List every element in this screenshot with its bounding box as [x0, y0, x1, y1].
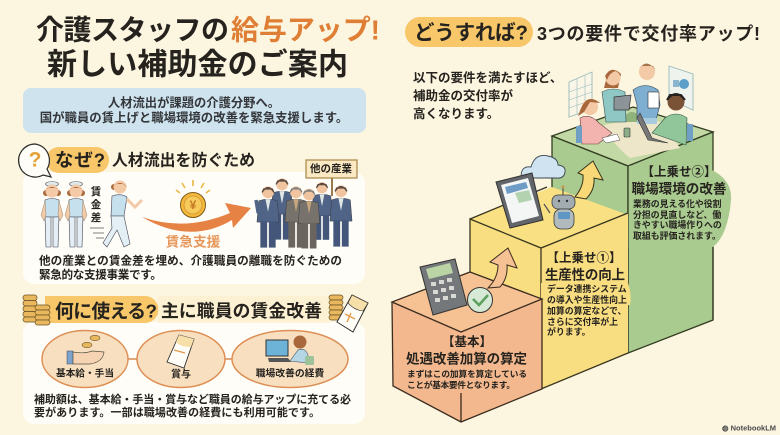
icon: yen coin: ¥ — [190, 198, 197, 212]
icon: coin stack and envelope right — [329, 295, 368, 332]
text: why body: 緊急的な支援事業です。 — [39, 268, 162, 282]
text: how intro: 高くなります。 — [413, 106, 499, 121]
heading: how — [405, 17, 760, 47]
label: productivity: の導入や生産性向上 — [547, 294, 627, 305]
icon: cloud — [521, 155, 565, 178]
label: basic: 処遇改善加算の算定 — [406, 350, 528, 366]
label: workplace improvement: 職場環境の改善 — [632, 180, 726, 196]
panel: why — [19, 144, 365, 284]
label: workplace improvement: 業務の見える化や役割 — [633, 198, 722, 209]
icon: nursing staff: 賃 — [91, 185, 102, 198]
title: 介護スタッフの — [36, 14, 229, 46]
text: uses body: 補助額は、基本給・手当・賞与など職員の給与アップに充てる必 — [34, 392, 351, 406]
heading: why: なぜ? — [55, 150, 105, 170]
heading: uses: 何に使える? — [55, 300, 157, 322]
label: basic: まずはこの加算を算定している — [407, 368, 527, 379]
label: productivity: データ連携システム — [547, 283, 627, 294]
label: workplace improvement: きやすい職場作りへの — [633, 219, 722, 230]
text: why body — [39, 254, 342, 282]
text: how intro: 補助金の交付率が — [413, 88, 514, 103]
icon: calculator — [420, 259, 467, 315]
heading: uses: 主に職員の賃金改善 — [161, 301, 322, 321]
title: 新しい補助金のご案内 — [47, 48, 348, 82]
arrow: orange up — [488, 248, 517, 288]
person standing left — [604, 70, 621, 88]
text: uses body: 要があります。一部は職場改善の経費にも利用可能です。 — [34, 405, 320, 419]
label: workplace improvement: 分担の見直しなど、働 — [633, 209, 721, 220]
text: how intro: 以下の要件を満たすほど、 — [413, 70, 562, 85]
label: productivity — [545, 250, 627, 337]
person standing right — [639, 64, 655, 80]
label: workplace improvement: 取組も評価されます。 — [633, 230, 721, 241]
step: productivity — [470, 187, 631, 389]
label: workplace improvement: 【上乗せ②】 — [641, 164, 717, 179]
title: 給与アップ! — [231, 14, 380, 46]
oval: bonus: 賞与 — [171, 368, 191, 380]
arrow: wage support — [142, 203, 251, 232]
step: workplace improvement — [552, 107, 731, 380]
label: productivity: 加算の算定などで、 — [547, 305, 626, 316]
icon: other industries workers — [256, 178, 352, 248]
intro box — [23, 88, 366, 133]
icon: coin stacks left — [23, 295, 50, 325]
icon: nursing staff — [41, 180, 142, 247]
illustration: team meeting — [569, 64, 693, 145]
text: uses body — [34, 392, 351, 419]
icon: check badge — [468, 288, 492, 312]
text: why body: 他の産業との賃金差を埋め、介護職員の離職を防ぐための — [39, 254, 342, 268]
logo: NotebookLM: ◍ NotebookLM — [722, 424, 776, 432]
sign: other industries — [306, 160, 357, 178]
heading: how: 3つの要件で交付率アップ! — [537, 24, 760, 44]
connectors — [127, 358, 233, 360]
label: productivity: 【上乗せ①】 — [546, 250, 622, 265]
oval: base pay: 基本給・手当 — [56, 366, 114, 380]
oval: workplace improvement — [232, 330, 348, 388]
label: productivity: がります。 — [547, 326, 590, 337]
arrow: yellow up — [575, 161, 603, 199]
heading: why — [19, 144, 255, 177]
icon: nursing staff: 差 — [91, 211, 101, 224]
label: basic: 【基本】 — [442, 334, 492, 349]
panel: uses — [23, 295, 368, 424]
step: basic — [392, 272, 542, 422]
person seated right — [668, 94, 684, 110]
intro box: 国が職員の賃上げと職場環境の改善を緊急支援します。 — [40, 110, 348, 125]
label: basic: ことが基本要件となります。 — [407, 379, 515, 390]
icon: yen coin — [176, 180, 210, 218]
icon: robot — [544, 186, 575, 229]
heading: how: どうすれば? — [414, 22, 528, 44]
oval: base pay — [42, 330, 128, 388]
title — [36, 14, 380, 82]
label: basic — [406, 334, 528, 390]
label: productivity: 生産性の向上 — [545, 266, 625, 282]
plant — [622, 112, 645, 122]
label: workplace improvement — [632, 164, 726, 241]
heading: why: ? — [29, 148, 41, 172]
chart sheets — [569, 72, 592, 117]
text: how intro — [413, 70, 562, 121]
oval: workplace improvement: 職場改善の経費 — [256, 366, 324, 380]
oval: bonus — [137, 330, 225, 388]
person seated left — [582, 99, 598, 115]
label: productivity: さらに交付率が上 — [547, 316, 618, 327]
heading: why: 人材流出を防ぐため — [112, 150, 255, 170]
heading: uses — [45, 296, 330, 323]
icon: tablet — [496, 173, 543, 228]
sign: other industries: 他の産業 — [310, 162, 352, 175]
icon: nursing staff: 金 — [91, 198, 102, 211]
laptop and desk items — [637, 113, 668, 143]
staircase chart — [392, 64, 731, 422]
label: emergency support: 賃急支援 — [166, 234, 221, 250]
intro box: 人材流出が課題の介護分野へ。 — [108, 95, 280, 110]
